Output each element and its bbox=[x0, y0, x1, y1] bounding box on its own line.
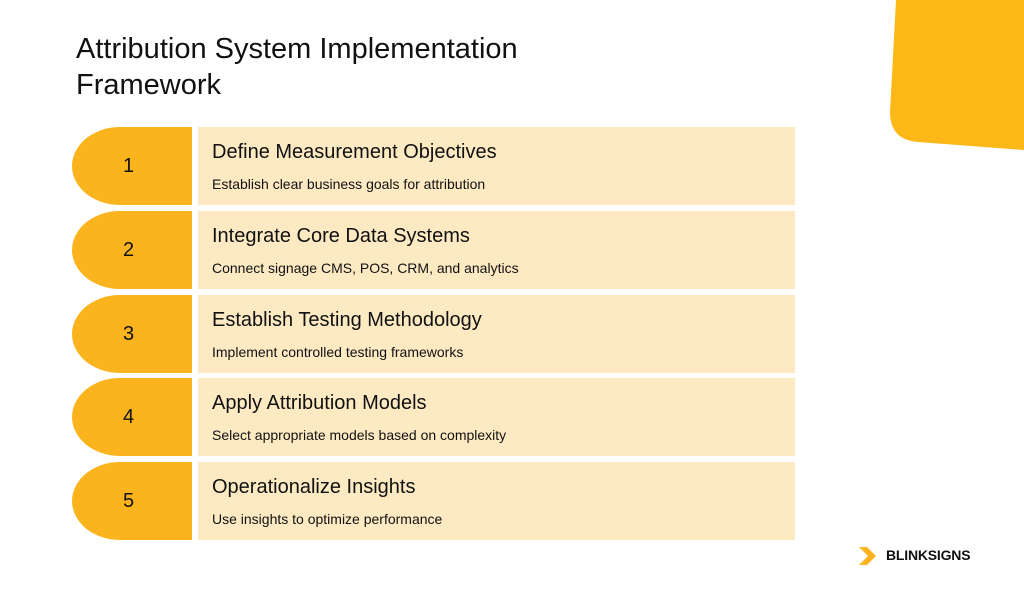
step 4: Apply Attribution Models bbox=[212, 392, 427, 414]
step 3: Implement controlled testing frameworks bbox=[212, 344, 463, 360]
step 2: Connect signage CMS, POS, CRM, and analytics bbox=[212, 260, 519, 276]
title: Attribution System Implementation bbox=[76, 33, 518, 65]
step 4: 4 bbox=[123, 406, 134, 428]
title: Framework bbox=[76, 69, 221, 101]
step 4 bbox=[72, 378, 795, 456]
step 2: 2 bbox=[123, 239, 134, 261]
step 3: 3 bbox=[123, 323, 134, 345]
step 2: Integrate Core Data Systems bbox=[212, 225, 470, 247]
step 5: Use insights to optimize performance bbox=[212, 511, 442, 527]
step 1 bbox=[72, 127, 795, 205]
logo bbox=[859, 547, 970, 565]
step 5 bbox=[72, 462, 795, 540]
step 2 bbox=[72, 211, 795, 289]
step 5: 5 bbox=[123, 490, 134, 512]
step 4: Select appropriate models based on complexity bbox=[212, 427, 506, 443]
step 3: Establish Testing Methodology bbox=[212, 309, 482, 331]
step 1: 1 bbox=[123, 155, 134, 177]
step 1: Define Measurement Objectives bbox=[212, 141, 497, 163]
step 1: Establish clear business goals for attribution bbox=[212, 176, 485, 192]
title bbox=[76, 33, 518, 101]
logo: BLINKSIGNS bbox=[886, 547, 970, 563]
step 3 bbox=[72, 295, 795, 373]
step 5: Operationalize Insights bbox=[212, 476, 415, 498]
